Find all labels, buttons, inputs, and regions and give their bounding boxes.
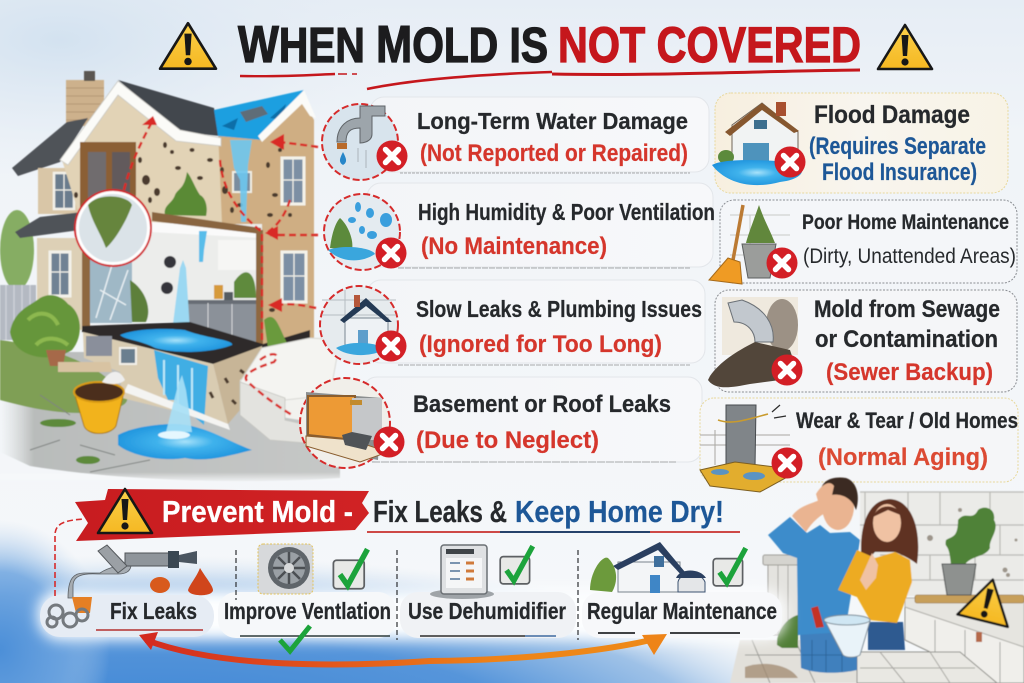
row 3 subheading: (Ignored for Too Long) xyxy=(419,331,662,358)
circle callout: mold on window xyxy=(75,190,151,266)
panel: prevention section xyxy=(38,489,786,664)
row 1 icon: dripping faucet xyxy=(322,104,408,180)
icon: ventilation fan xyxy=(258,544,313,594)
row 4 heading: Basement or Roof Leaks xyxy=(413,391,671,418)
banner blue text: Keep Home Dry! xyxy=(515,494,724,529)
dashed dividers xyxy=(236,550,578,640)
icon: left warning triangle xyxy=(160,23,216,69)
ground: pavement and grass xyxy=(0,340,340,483)
illustration: couple in moldy patio xyxy=(730,478,1024,683)
row 4 icon: basement cutaway xyxy=(300,378,404,468)
icon: house and bush xyxy=(590,542,706,593)
white glow behind items xyxy=(38,590,786,640)
red arrowheads on house xyxy=(142,116,284,312)
dehumidifier label: Use Dehumidifier xyxy=(408,598,566,624)
row 1 card xyxy=(322,97,709,180)
banner dark text: Fix Leaks & xyxy=(373,494,507,529)
patio steps xyxy=(124,336,340,445)
sewage card xyxy=(708,290,1017,392)
lower left wall xyxy=(37,238,83,330)
title text: not covered: NOT COVERED xyxy=(558,17,861,73)
patio floor tiles xyxy=(730,640,860,683)
woman xyxy=(838,499,918,650)
red dashed connector xyxy=(55,519,85,596)
item backgrounds xyxy=(40,592,782,638)
row 3 card xyxy=(320,280,705,365)
red ribbon xyxy=(75,489,369,541)
wear and tear card xyxy=(700,398,1018,492)
white bucket held xyxy=(811,606,870,657)
icon: patio warning triangle xyxy=(957,573,1018,627)
row 4 subheading: (Due to Neglect) xyxy=(416,427,599,454)
row 4 card xyxy=(300,377,702,468)
panel: right causes list xyxy=(700,93,1018,492)
row 2 card xyxy=(324,183,715,270)
upper left wall xyxy=(38,168,82,214)
interior room xyxy=(82,212,263,348)
yellow bucket xyxy=(74,372,125,434)
row 3 icon: leaking house xyxy=(320,286,406,364)
banner red text: Prevent Mold - xyxy=(162,494,353,529)
upper windows xyxy=(80,142,306,302)
ventilation check mark xyxy=(280,626,310,651)
maintenance label: Regular Maintenance xyxy=(587,598,777,624)
left roof xyxy=(12,118,88,176)
fix leaks item xyxy=(47,545,213,630)
flood damage card xyxy=(712,93,1008,193)
cycle arrow xyxy=(139,632,667,664)
wear and tear x badge xyxy=(772,448,802,478)
title xyxy=(160,16,932,89)
fix leaks label: Fix Leaks xyxy=(110,598,197,624)
flood heading: Flood Damage xyxy=(814,101,970,129)
brick wall xyxy=(860,492,1024,596)
red dashed arrows on house xyxy=(124,122,318,415)
sewage heading line 1: Mold from Sewage xyxy=(814,296,1000,323)
row 4 x badge xyxy=(374,426,404,458)
icon: sewer pipe xyxy=(708,297,802,387)
row 2 x badge xyxy=(376,238,406,268)
man xyxy=(768,478,860,673)
row 3 heading: Slow Leaks & Plumbing Issues xyxy=(416,296,702,322)
flood subheading line 2: Flood Insurance) xyxy=(822,159,977,186)
wear and tear subheading: (Normal Aging) xyxy=(818,444,988,471)
sewage subheading: (Sewer Backup) xyxy=(826,359,993,386)
poor maintenance x badge xyxy=(766,248,798,278)
dehumidifier item xyxy=(408,545,566,636)
kitchen counter xyxy=(905,595,1024,683)
right tan wall xyxy=(218,100,314,345)
water dripping from roof xyxy=(230,140,252,222)
chimney xyxy=(66,71,104,126)
floor water puddle xyxy=(118,375,252,459)
title text: when mold is: WHEN MOLD IS xyxy=(238,16,548,74)
right roof with blue water xyxy=(214,90,316,142)
background tree and fence xyxy=(0,210,36,340)
panel: left causes list xyxy=(300,97,715,468)
row 1 heading: Long-Term Water Damage xyxy=(417,108,688,134)
floor slab with water xyxy=(82,322,310,364)
stone pillar xyxy=(763,555,799,635)
bushes xyxy=(10,295,288,372)
row 2 heading: High Humidity & Poor Ventilation xyxy=(418,199,715,225)
poor maintenance card xyxy=(709,200,1017,284)
sewage heading line 2: or Contamination xyxy=(815,326,998,353)
icon: small bush xyxy=(777,615,798,648)
icon: pipe wrench and leaking pipe xyxy=(47,545,213,627)
bush on ledge xyxy=(165,172,207,216)
ventilation label: Improve Ventlation xyxy=(224,598,391,624)
stone front slab xyxy=(857,652,997,683)
maintenance item xyxy=(587,542,777,633)
foundation xyxy=(83,332,264,425)
icon: banner warning xyxy=(98,489,152,533)
mold specks xyxy=(74,142,292,312)
lower left roof xyxy=(15,212,82,238)
flood subheading line 1: (Requires Separate xyxy=(809,133,986,160)
sewage x badge xyxy=(772,354,802,386)
potted plant xyxy=(942,508,996,595)
ventilation checkbox xyxy=(333,549,368,589)
main roof xyxy=(118,80,220,136)
ventilation item xyxy=(224,544,391,651)
icon: cracked wall panel xyxy=(700,405,802,492)
row 1 subheading: (Not Reported or Repaired) xyxy=(420,140,688,167)
main upper wall xyxy=(62,92,222,224)
banner xyxy=(75,489,740,541)
row 3 x badge xyxy=(376,330,406,362)
row 2 subheading: (No Maintenance) xyxy=(421,233,607,260)
icon: flooded house xyxy=(712,102,806,185)
icon: right warning triangle xyxy=(878,25,932,69)
house illustration xyxy=(0,71,340,483)
row 2 icon: humidity droplets xyxy=(324,194,406,270)
dehumidifier checkbox xyxy=(500,546,533,584)
row 1 x badge xyxy=(376,140,408,172)
icon: dehumidifier xyxy=(430,545,494,599)
icon: broom and plant pot xyxy=(709,205,798,284)
maintenance checkbox xyxy=(713,548,746,586)
flood x badge xyxy=(774,146,806,178)
